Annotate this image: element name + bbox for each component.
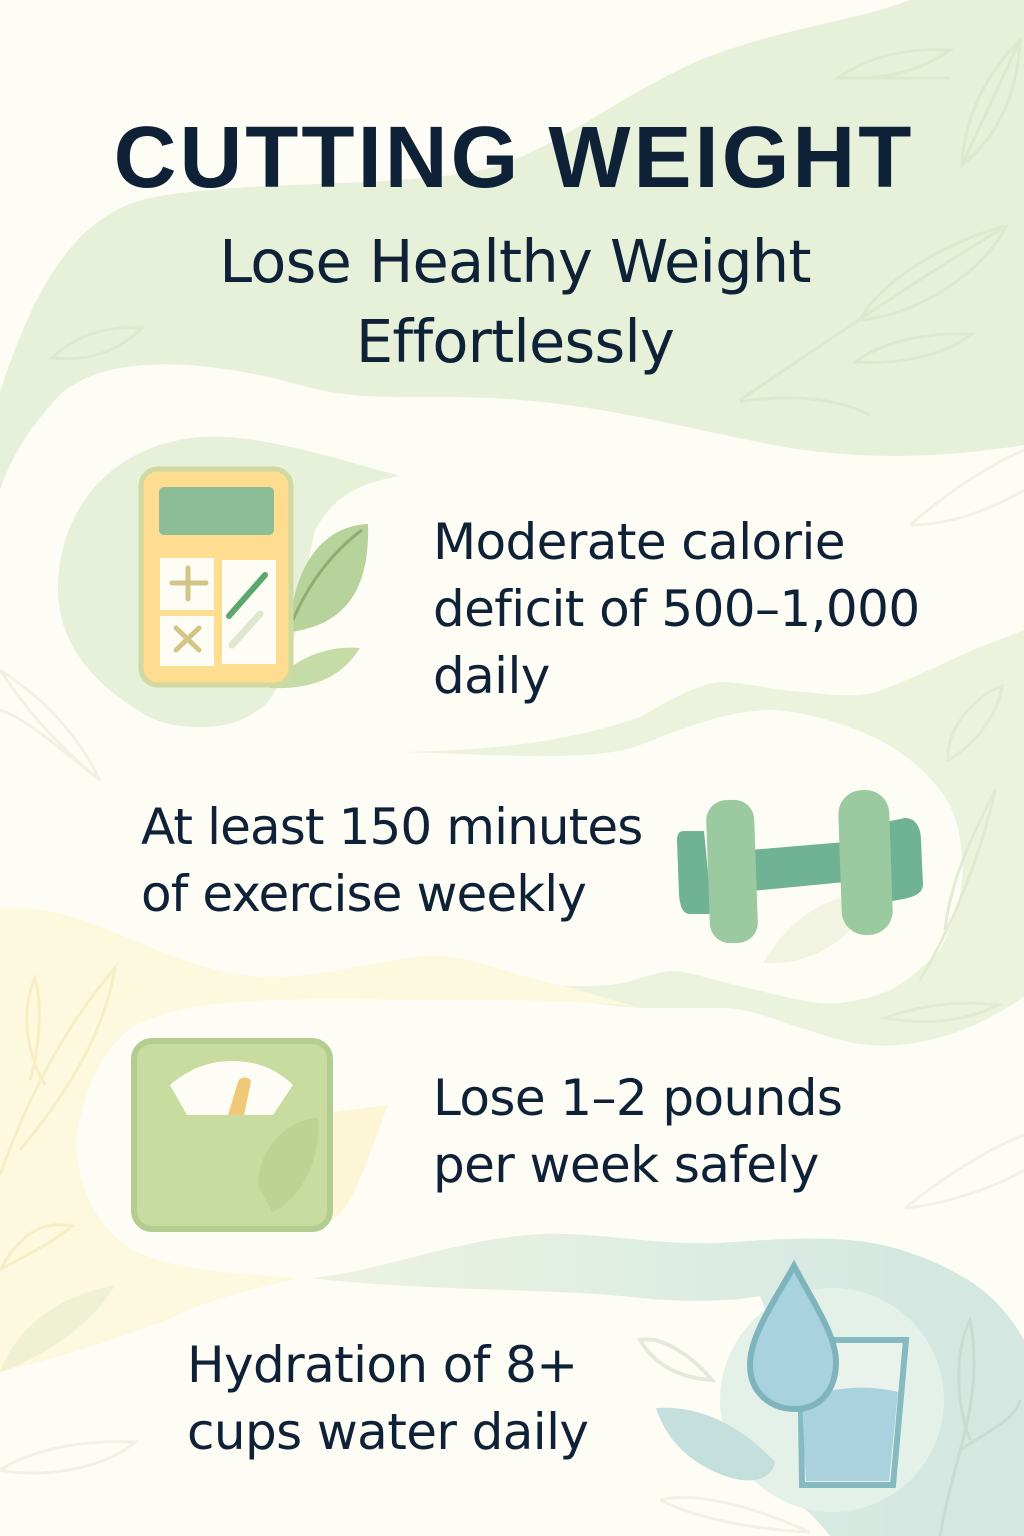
text: pounds: Lose 1–2 pounds xyxy=(433,1069,842,1127)
text: hydration xyxy=(187,1336,588,1461)
subtitle: Effortlessly xyxy=(356,307,674,376)
text: calorie deficit: deficit of 500–1,000 xyxy=(433,580,920,638)
text: calorie deficit xyxy=(433,513,920,705)
text: exercise: of exercise weekly xyxy=(141,865,586,923)
text: pounds: per week safely xyxy=(433,1136,819,1194)
text: exercise xyxy=(141,798,642,923)
text: hydration: Hydration of 8+ xyxy=(187,1336,578,1394)
text: calorie deficit: Moderate calorie xyxy=(433,513,845,571)
subtitle: Lose Healthy Weight xyxy=(219,227,811,296)
subtitle xyxy=(219,227,811,376)
title: CUTTING WEIGHT xyxy=(114,109,914,206)
text: exercise: At least 150 minutes xyxy=(141,798,642,856)
text: hydration: cups water daily xyxy=(187,1403,588,1461)
section blob leaves xyxy=(58,437,400,727)
text: calorie deficit: daily xyxy=(433,647,550,705)
text: pounds xyxy=(433,1069,842,1194)
